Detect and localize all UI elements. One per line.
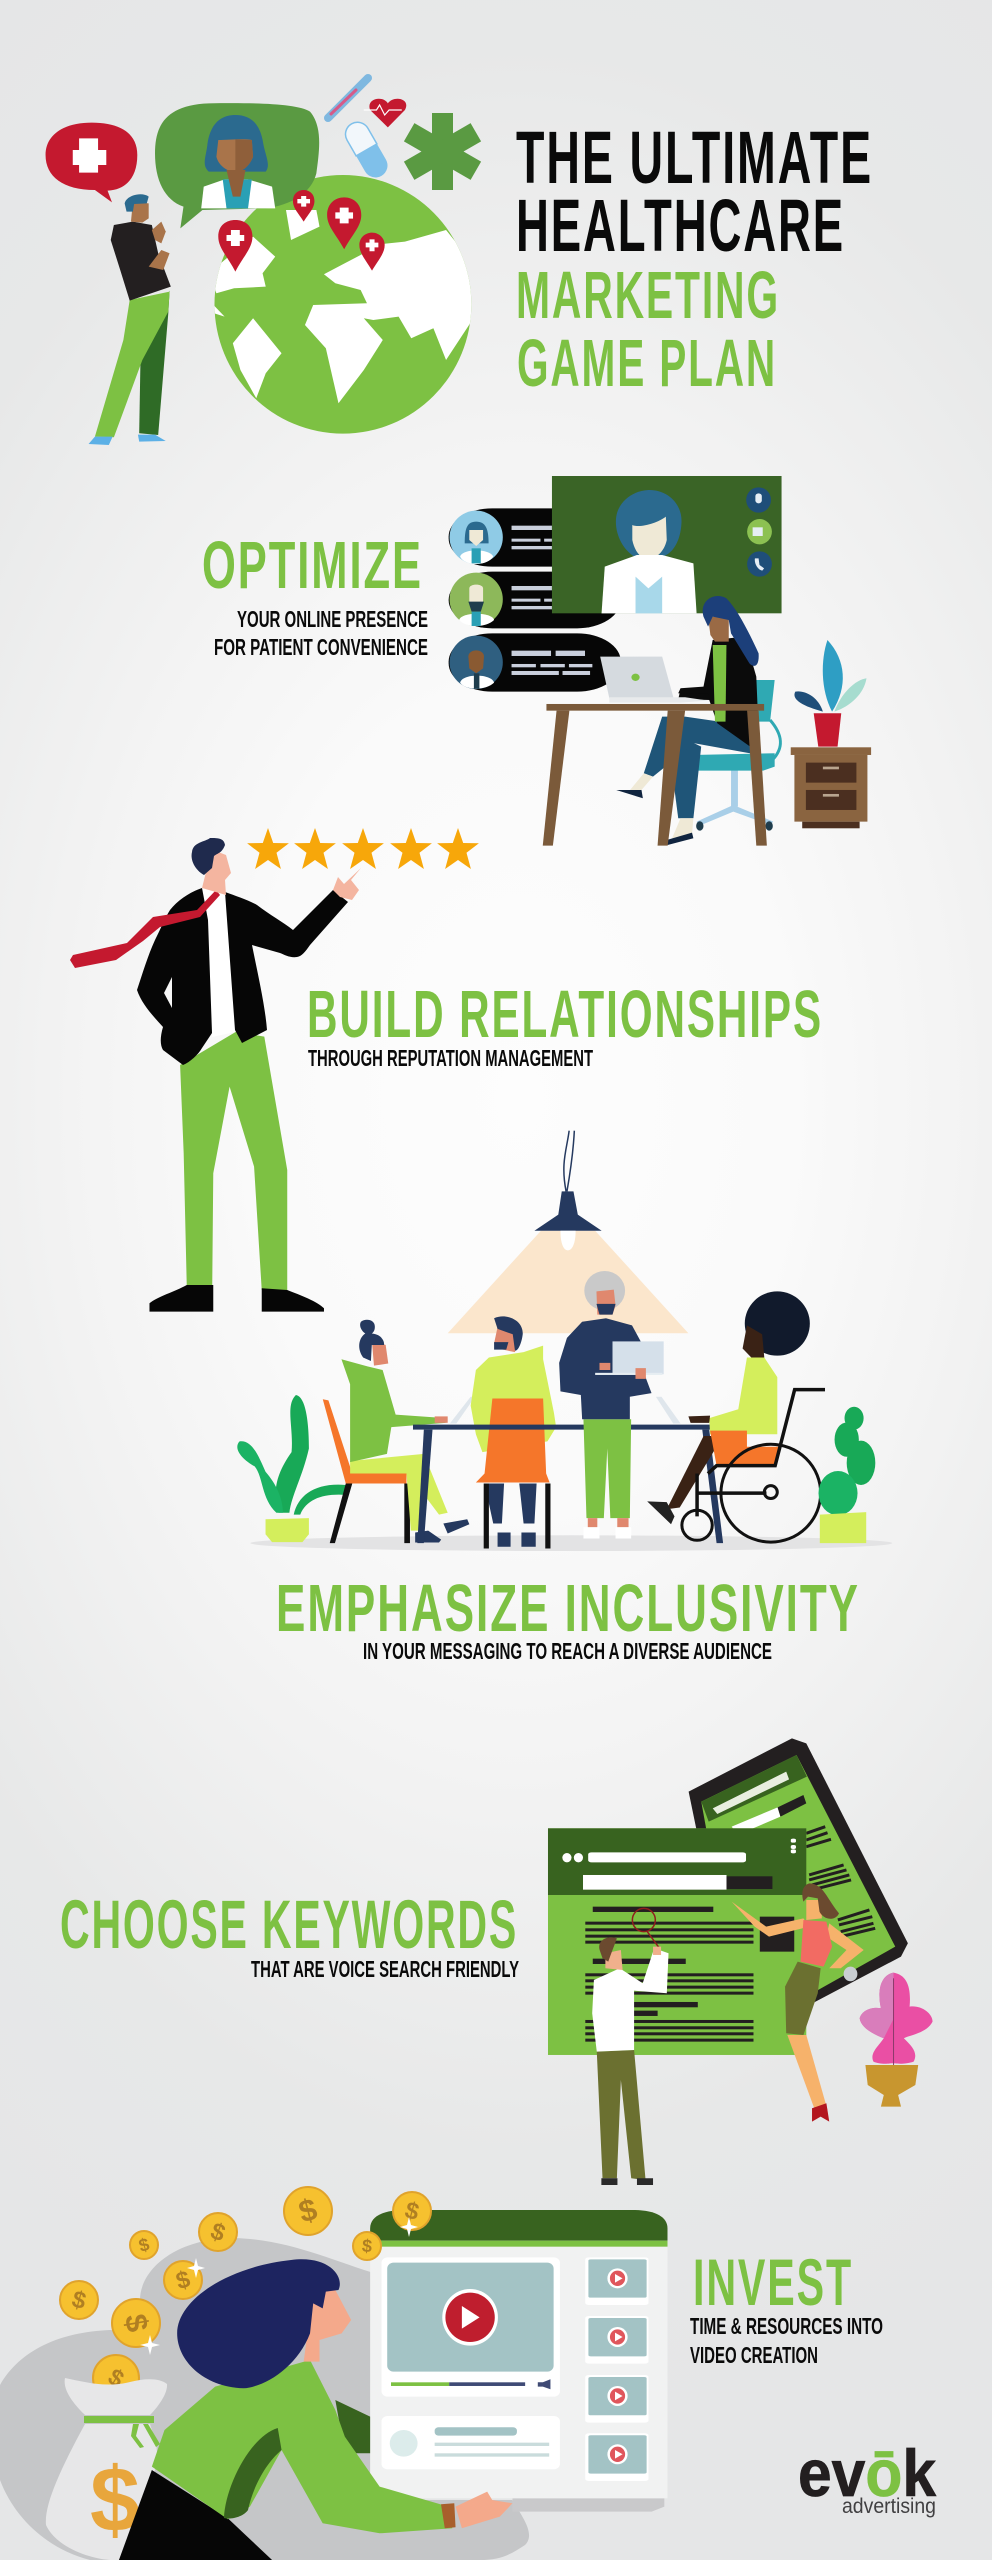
illustration: invest in video creation — [0, 2187, 667, 2560]
text: your online presence for patient convenience — [214, 606, 428, 660]
text: time and resources into video creation — [690, 2313, 883, 2368]
coin — [199, 2213, 237, 2251]
table — [413, 1425, 725, 1543]
info card — [382, 2416, 560, 2469]
icon: five star rating — [247, 828, 479, 869]
logo: evok advertising: advertising — [842, 2495, 936, 2518]
title block — [516, 116, 873, 401]
heading: invest: INVEST — [693, 2245, 853, 2319]
shirt — [202, 886, 235, 1037]
coin: $ — [207, 2217, 229, 2248]
person 2: man in yellow hoodie on orange chair — [471, 1316, 556, 1549]
section: build relationships — [307, 977, 823, 1071]
pendant lamp — [534, 1131, 602, 1250]
coin — [93, 2355, 139, 2401]
money bag: $ — [90, 2449, 140, 2551]
coin: $ — [118, 2311, 155, 2334]
title: marketing game plan: GAME PLAN — [517, 326, 777, 401]
icon: capsule pill — [341, 118, 392, 182]
illustration: telehealth video call — [449, 476, 871, 846]
logo: evok advertising: evōk — [798, 2436, 936, 2510]
coin: $ — [173, 2266, 194, 2295]
map pins — [218, 190, 385, 272]
coin: $ — [103, 2363, 129, 2394]
title: marketing game plan: MARKETING — [516, 258, 780, 333]
search results window — [548, 1828, 806, 2055]
heading: optimize: OPTIMIZE — [202, 528, 423, 603]
video browser window — [370, 2210, 667, 2512]
title: the ultimate healthcare — [516, 116, 873, 267]
head — [192, 838, 231, 895]
pointing hand — [333, 868, 361, 900]
green speech bubble with doctor — [155, 103, 319, 228]
coin — [164, 2261, 202, 2299]
black blazer — [137, 888, 348, 1065]
video thumbnails — [585, 2257, 649, 2481]
text: time and resources into video creation: VIDEO CREATION — [690, 2342, 818, 2368]
globe — [209, 175, 481, 434]
plant: pink — [860, 1973, 933, 2107]
contact list pills — [449, 508, 621, 692]
smartphone — [689, 1738, 908, 2005]
section: optimize — [202, 528, 428, 660]
illustration: keyword search — [548, 1738, 933, 2185]
man with phone — [89, 194, 171, 445]
text: in your messaging: IN YOUR MESSAGING TO REACH A DIVERSE AUDIENCE — [363, 1638, 772, 1664]
text: through reputation management: THROUGH REPUTATION MANAGEMENT — [308, 1045, 593, 1071]
coin: $ — [69, 2286, 89, 2315]
coins on window — [353, 2192, 431, 2260]
plant left — [237, 1395, 347, 1542]
coin: $ — [295, 2191, 321, 2230]
sparkles — [140, 2217, 418, 2355]
video call screen — [552, 476, 782, 613]
plant right: cactus — [819, 1407, 875, 1543]
office chair — [692, 680, 780, 831]
hero illustration: global healthcare — [46, 99, 481, 445]
grey backdrop blob — [0, 2238, 529, 2560]
arm gap — [164, 977, 172, 1008]
illustration: inclusive team meeting — [237, 1131, 892, 1551]
section: invest — [690, 2245, 883, 2368]
text: voice search friendly: THAT ARE VOICE SEARCH FRIENDLY — [251, 1956, 519, 1982]
trousers — [180, 1032, 287, 1290]
illustration: businessman pointing at stars — [70, 838, 361, 1312]
coin — [112, 2299, 160, 2347]
money bag — [46, 2378, 167, 2560]
icon: thermometer — [328, 78, 368, 118]
text: your online presence for patient convenience: FOR PATIENT CONVENIENCE — [214, 634, 428, 660]
lamp light cone — [448, 1231, 688, 1333]
coin: $ — [137, 2234, 151, 2256]
person 1: woman in green hoodie — [323, 1320, 469, 1543]
coins on window: $ — [402, 2197, 422, 2226]
person 4: woman in wheelchair — [647, 1291, 825, 1542]
text: your online presence for patient convenience: YOUR ONLINE PRESENCE — [237, 606, 428, 632]
icon: medical asterisk — [404, 113, 481, 190]
laptop — [600, 657, 708, 703]
section: choose keywords — [60, 1886, 519, 1982]
section: emphasize inclusivity — [276, 1571, 860, 1664]
coin — [60, 2281, 98, 2319]
red tie — [70, 890, 220, 968]
icon: red medical speech bubble — [46, 123, 137, 202]
icon: heart with pulse — [364, 99, 406, 127]
shoes — [149, 1285, 324, 1312]
coins — [60, 2187, 332, 2401]
coin — [284, 2187, 332, 2235]
floor shadow — [250, 1535, 892, 1551]
text: time and resources into video creation: TIME & RESOURCES INTO — [690, 2313, 883, 2339]
woman presenting — [119, 2259, 512, 2560]
wooden desk — [543, 704, 767, 846]
title: marketing game plan — [516, 258, 780, 401]
cabinet with plant — [791, 640, 871, 828]
man with magnifying glass — [592, 1908, 669, 2185]
main video player — [382, 2257, 560, 2397]
woman pointing — [732, 1883, 864, 2122]
coins on window: $ — [361, 2236, 373, 2256]
coin — [130, 2231, 158, 2259]
woman at desk — [616, 596, 760, 845]
heading: choose keywords: CHOOSE KEYWORDS — [60, 1886, 518, 1963]
laptops on table — [450, 1397, 681, 1424]
person 3: standing man with turban and laptop — [559, 1271, 664, 1539]
